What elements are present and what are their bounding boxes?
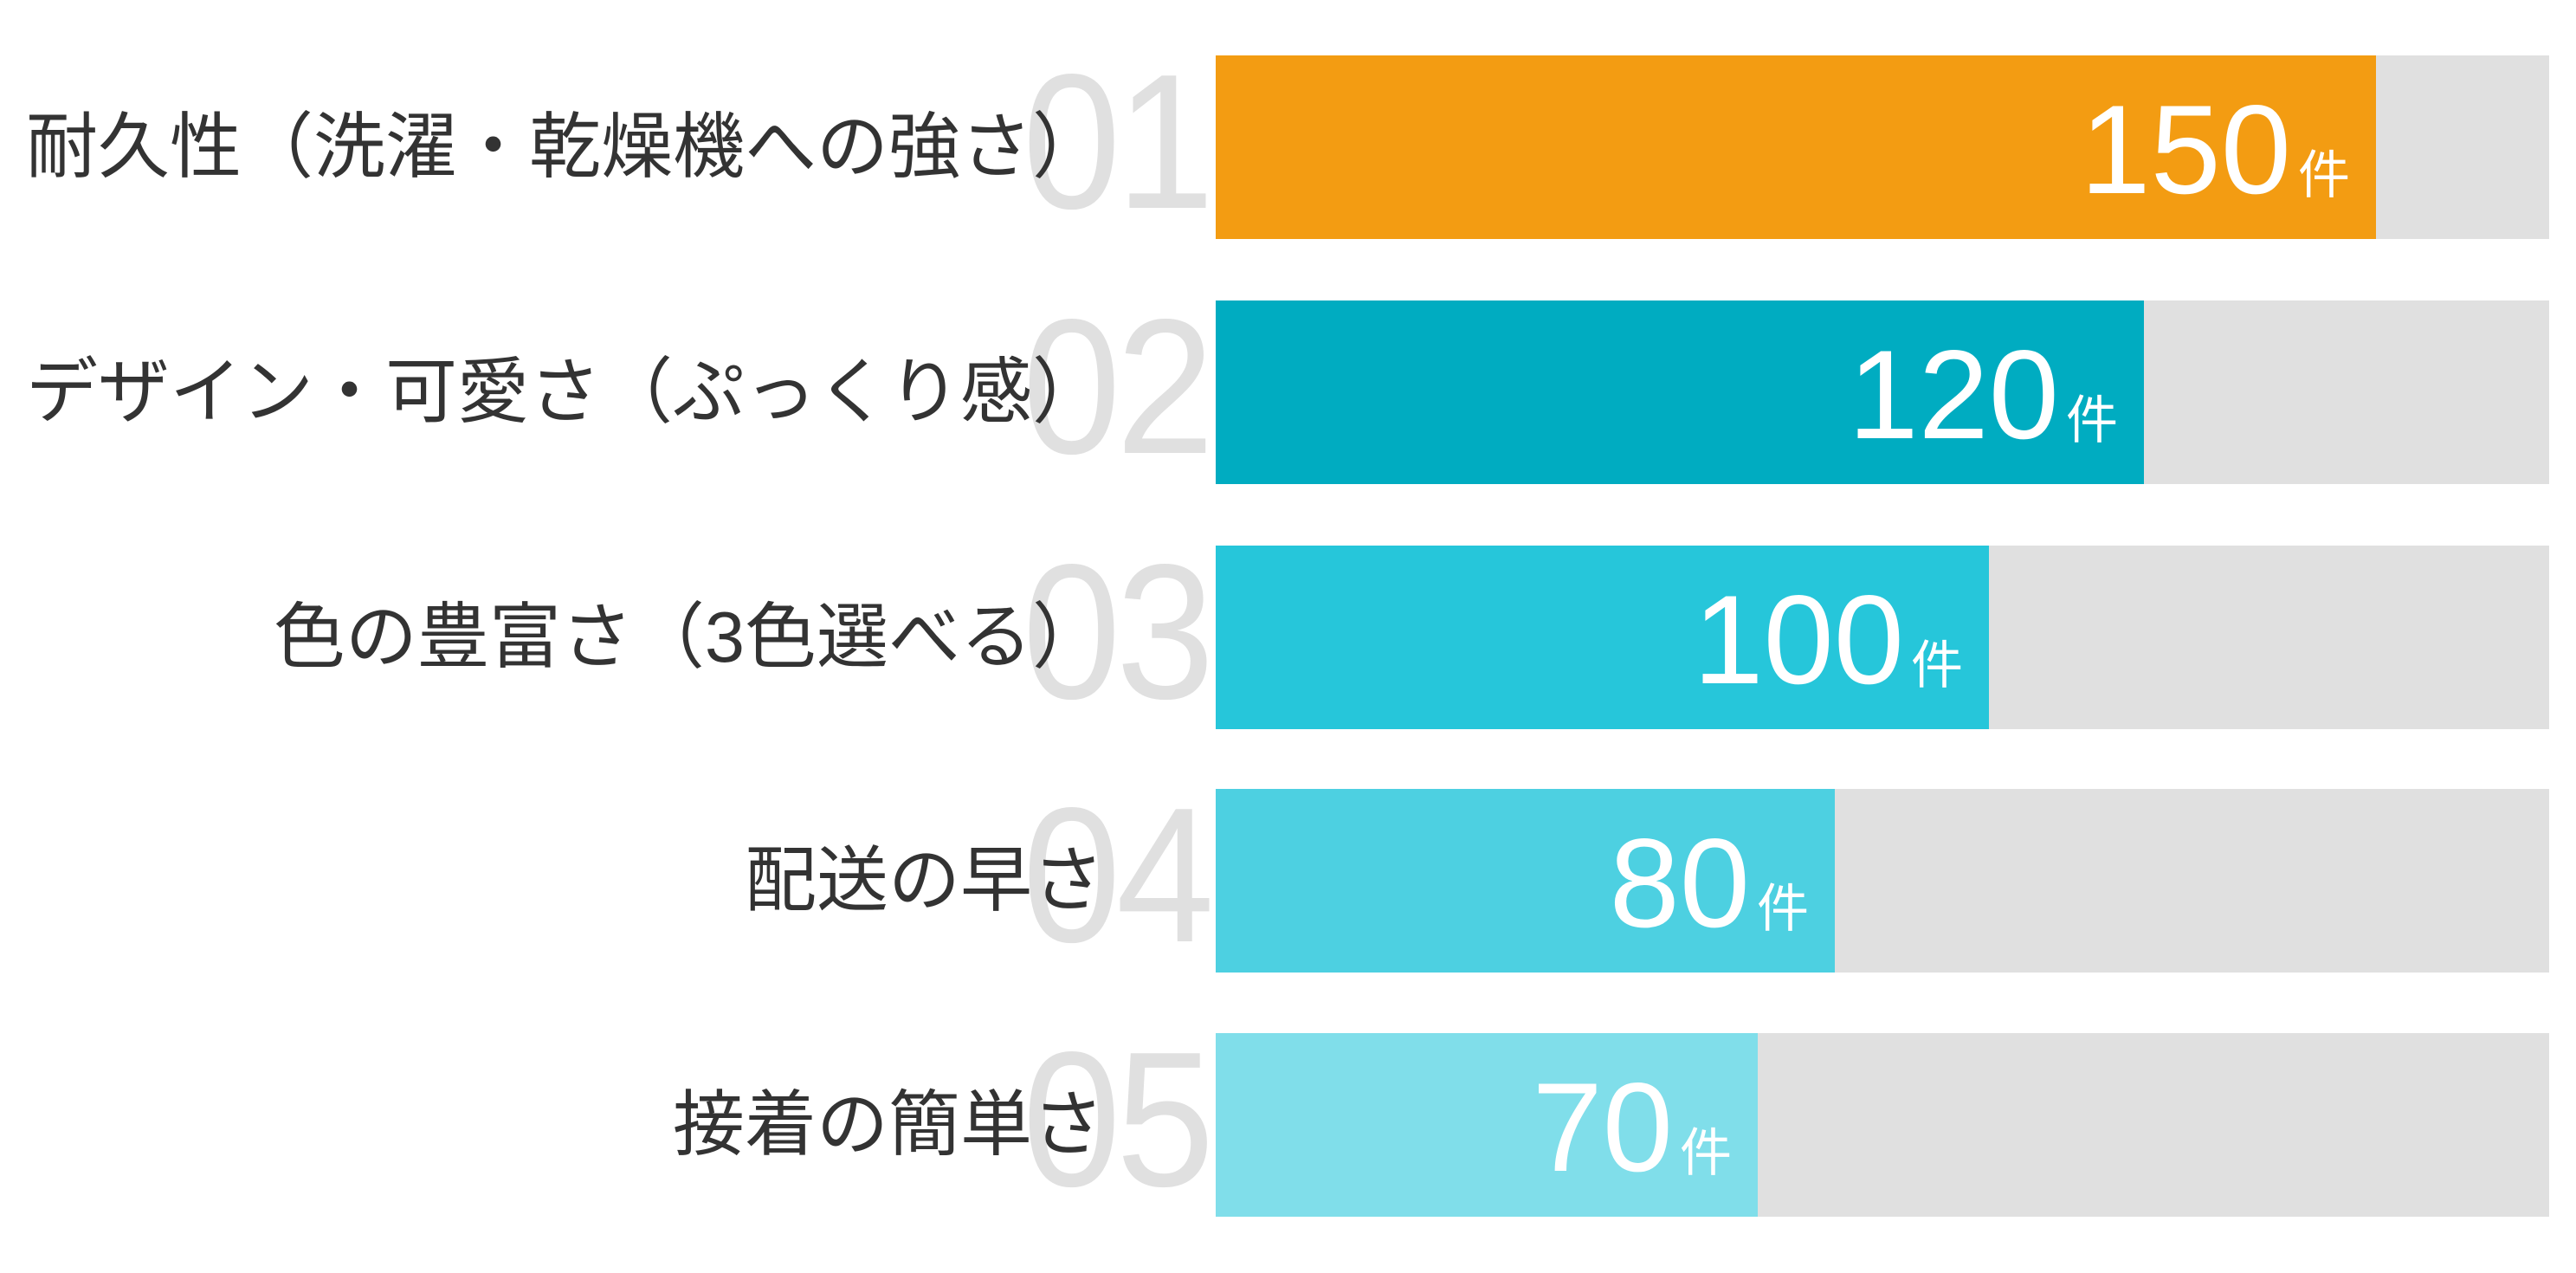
row 2	[26, 280, 2549, 494]
row 3	[274, 525, 2549, 740]
bar 3	[1216, 546, 1989, 729]
bar 1	[1216, 55, 2376, 239]
row 5	[673, 1012, 2549, 1227]
track 1	[1216, 55, 2549, 239]
bar 5: 70件	[1533, 1057, 1732, 1198]
row 4	[745, 768, 2549, 983]
rank number 03: 03	[1023, 525, 1210, 740]
label 4: 配送の早さ	[745, 840, 1104, 921]
bar 2	[1216, 300, 2144, 484]
bar 3: 100件	[1693, 569, 1963, 710]
label 5: 接着の簡単さ	[673, 1084, 1104, 1165]
rank number 02: 02	[1023, 280, 1210, 494]
bar 5	[1216, 1033, 1758, 1217]
track 4	[1216, 789, 2549, 973]
track 2	[1216, 300, 2549, 484]
rank number 01: 01	[1023, 35, 1210, 249]
bar 4: 80件	[1610, 812, 1809, 953]
bar 1: 150件	[2080, 79, 2350, 220]
track 3	[1216, 546, 2549, 729]
row 1	[26, 35, 2549, 249]
rank number 04: 04	[1023, 768, 1210, 983]
label 3: 色の豊富さ（3色選べる）	[274, 597, 1104, 677]
track 5	[1216, 1033, 2549, 1217]
bar 4	[1216, 789, 1835, 973]
bar 2: 120件	[1848, 324, 2118, 465]
label 2: デザイン・可愛さ（ぷっくり感）	[26, 352, 1104, 432]
label 1: 耐久性（洗濯・乾燥機への強さ）	[26, 107, 1104, 187]
rank number 05: 05	[1023, 1012, 1210, 1227]
